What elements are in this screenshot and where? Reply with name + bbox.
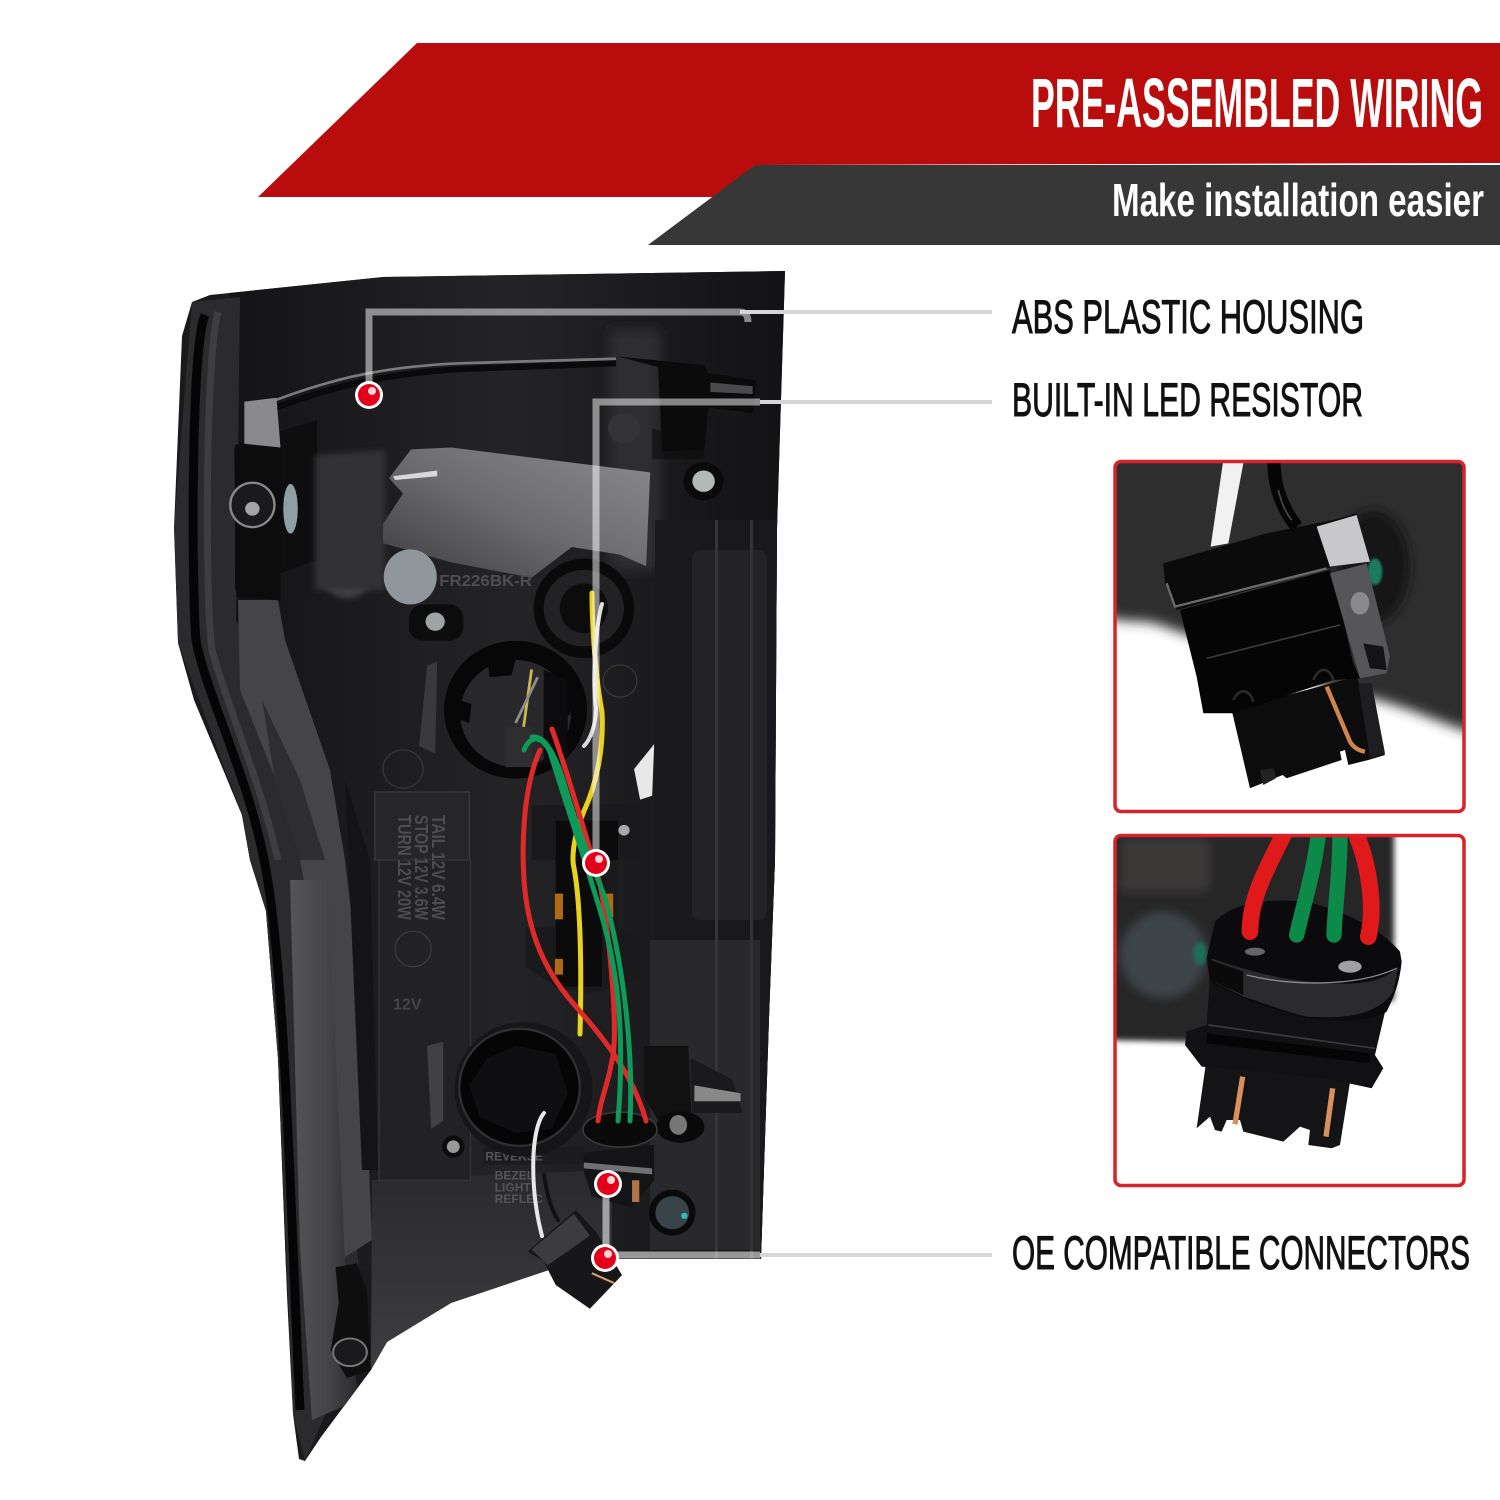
center bracket top xyxy=(532,803,640,860)
panel: connector close-up one xyxy=(1100,450,1480,812)
top bar xyxy=(266,359,616,404)
panel: lower housing details: BEZEL xyxy=(495,1169,534,1182)
connector tail xyxy=(1197,1058,1352,1148)
panel: lower housing details: REFLEC xyxy=(495,1192,543,1206)
marker dot: connector lower xyxy=(591,1244,619,1272)
tail light housing photo xyxy=(174,270,790,1461)
legal plate xyxy=(483,1147,584,1164)
marker dot: resistor xyxy=(582,849,610,877)
white wire xyxy=(1211,460,1244,547)
wires xyxy=(1250,835,1283,932)
rating text on label plate xyxy=(394,815,448,920)
rating text on label plate: TAIL 12V 6.4W xyxy=(428,815,448,920)
center bracket xyxy=(526,860,640,994)
panel: grey reflective block and mounts: FR226BK-R xyxy=(439,572,532,590)
cap xyxy=(1163,513,1370,610)
lower body xyxy=(371,1170,612,1370)
label plate xyxy=(375,792,469,860)
coloured wiring harness xyxy=(523,593,646,1236)
white sticker xyxy=(634,744,654,800)
clear tab xyxy=(1330,563,1390,678)
rubber grommet xyxy=(534,559,634,658)
marker dot: connector upper xyxy=(594,1170,622,1198)
panel: lower housing details xyxy=(331,860,743,1378)
right clip xyxy=(644,1046,692,1137)
right panel tone xyxy=(230,270,790,1270)
left outer band xyxy=(174,297,360,1461)
callout line: LED resistor xyxy=(596,402,992,863)
S-shaped grey strip xyxy=(238,600,372,1260)
lower socket xyxy=(454,1022,593,1157)
panel: lower housing details: 12V xyxy=(393,997,422,1013)
rating text on label plate: TURN 12V 20W xyxy=(394,815,414,920)
panel: grey reflective block and mounts xyxy=(230,356,757,860)
corner bolt bracket xyxy=(331,1263,371,1378)
marker dot: housing xyxy=(355,381,383,409)
panel: connector close-up two xyxy=(1100,825,1464,1186)
copper pin xyxy=(1327,687,1365,752)
callout line: connectors xyxy=(606,1184,992,1255)
panel: lower housing details: LIGHT xyxy=(495,1180,531,1194)
black wire xyxy=(1274,460,1297,527)
rating text on label plate: STOP 12V 3.6W xyxy=(411,815,431,920)
connector body xyxy=(1185,975,1387,1088)
copper pins xyxy=(1235,1077,1243,1124)
lens ghost circles xyxy=(327,588,366,600)
knob xyxy=(649,1190,696,1236)
connector tail xyxy=(1232,677,1385,788)
callout line: ABS plastic housing xyxy=(369,312,992,395)
connector body xyxy=(1180,570,1360,713)
stacked wiring socket xyxy=(584,1145,654,1208)
header banner: dark grey xyxy=(648,165,1500,245)
upper socket xyxy=(444,641,587,779)
header banner: red xyxy=(258,43,1500,197)
panel: lower housing details: REVERSE xyxy=(485,1150,543,1163)
loose connector xyxy=(528,1210,622,1309)
cap xyxy=(1207,901,1402,1020)
